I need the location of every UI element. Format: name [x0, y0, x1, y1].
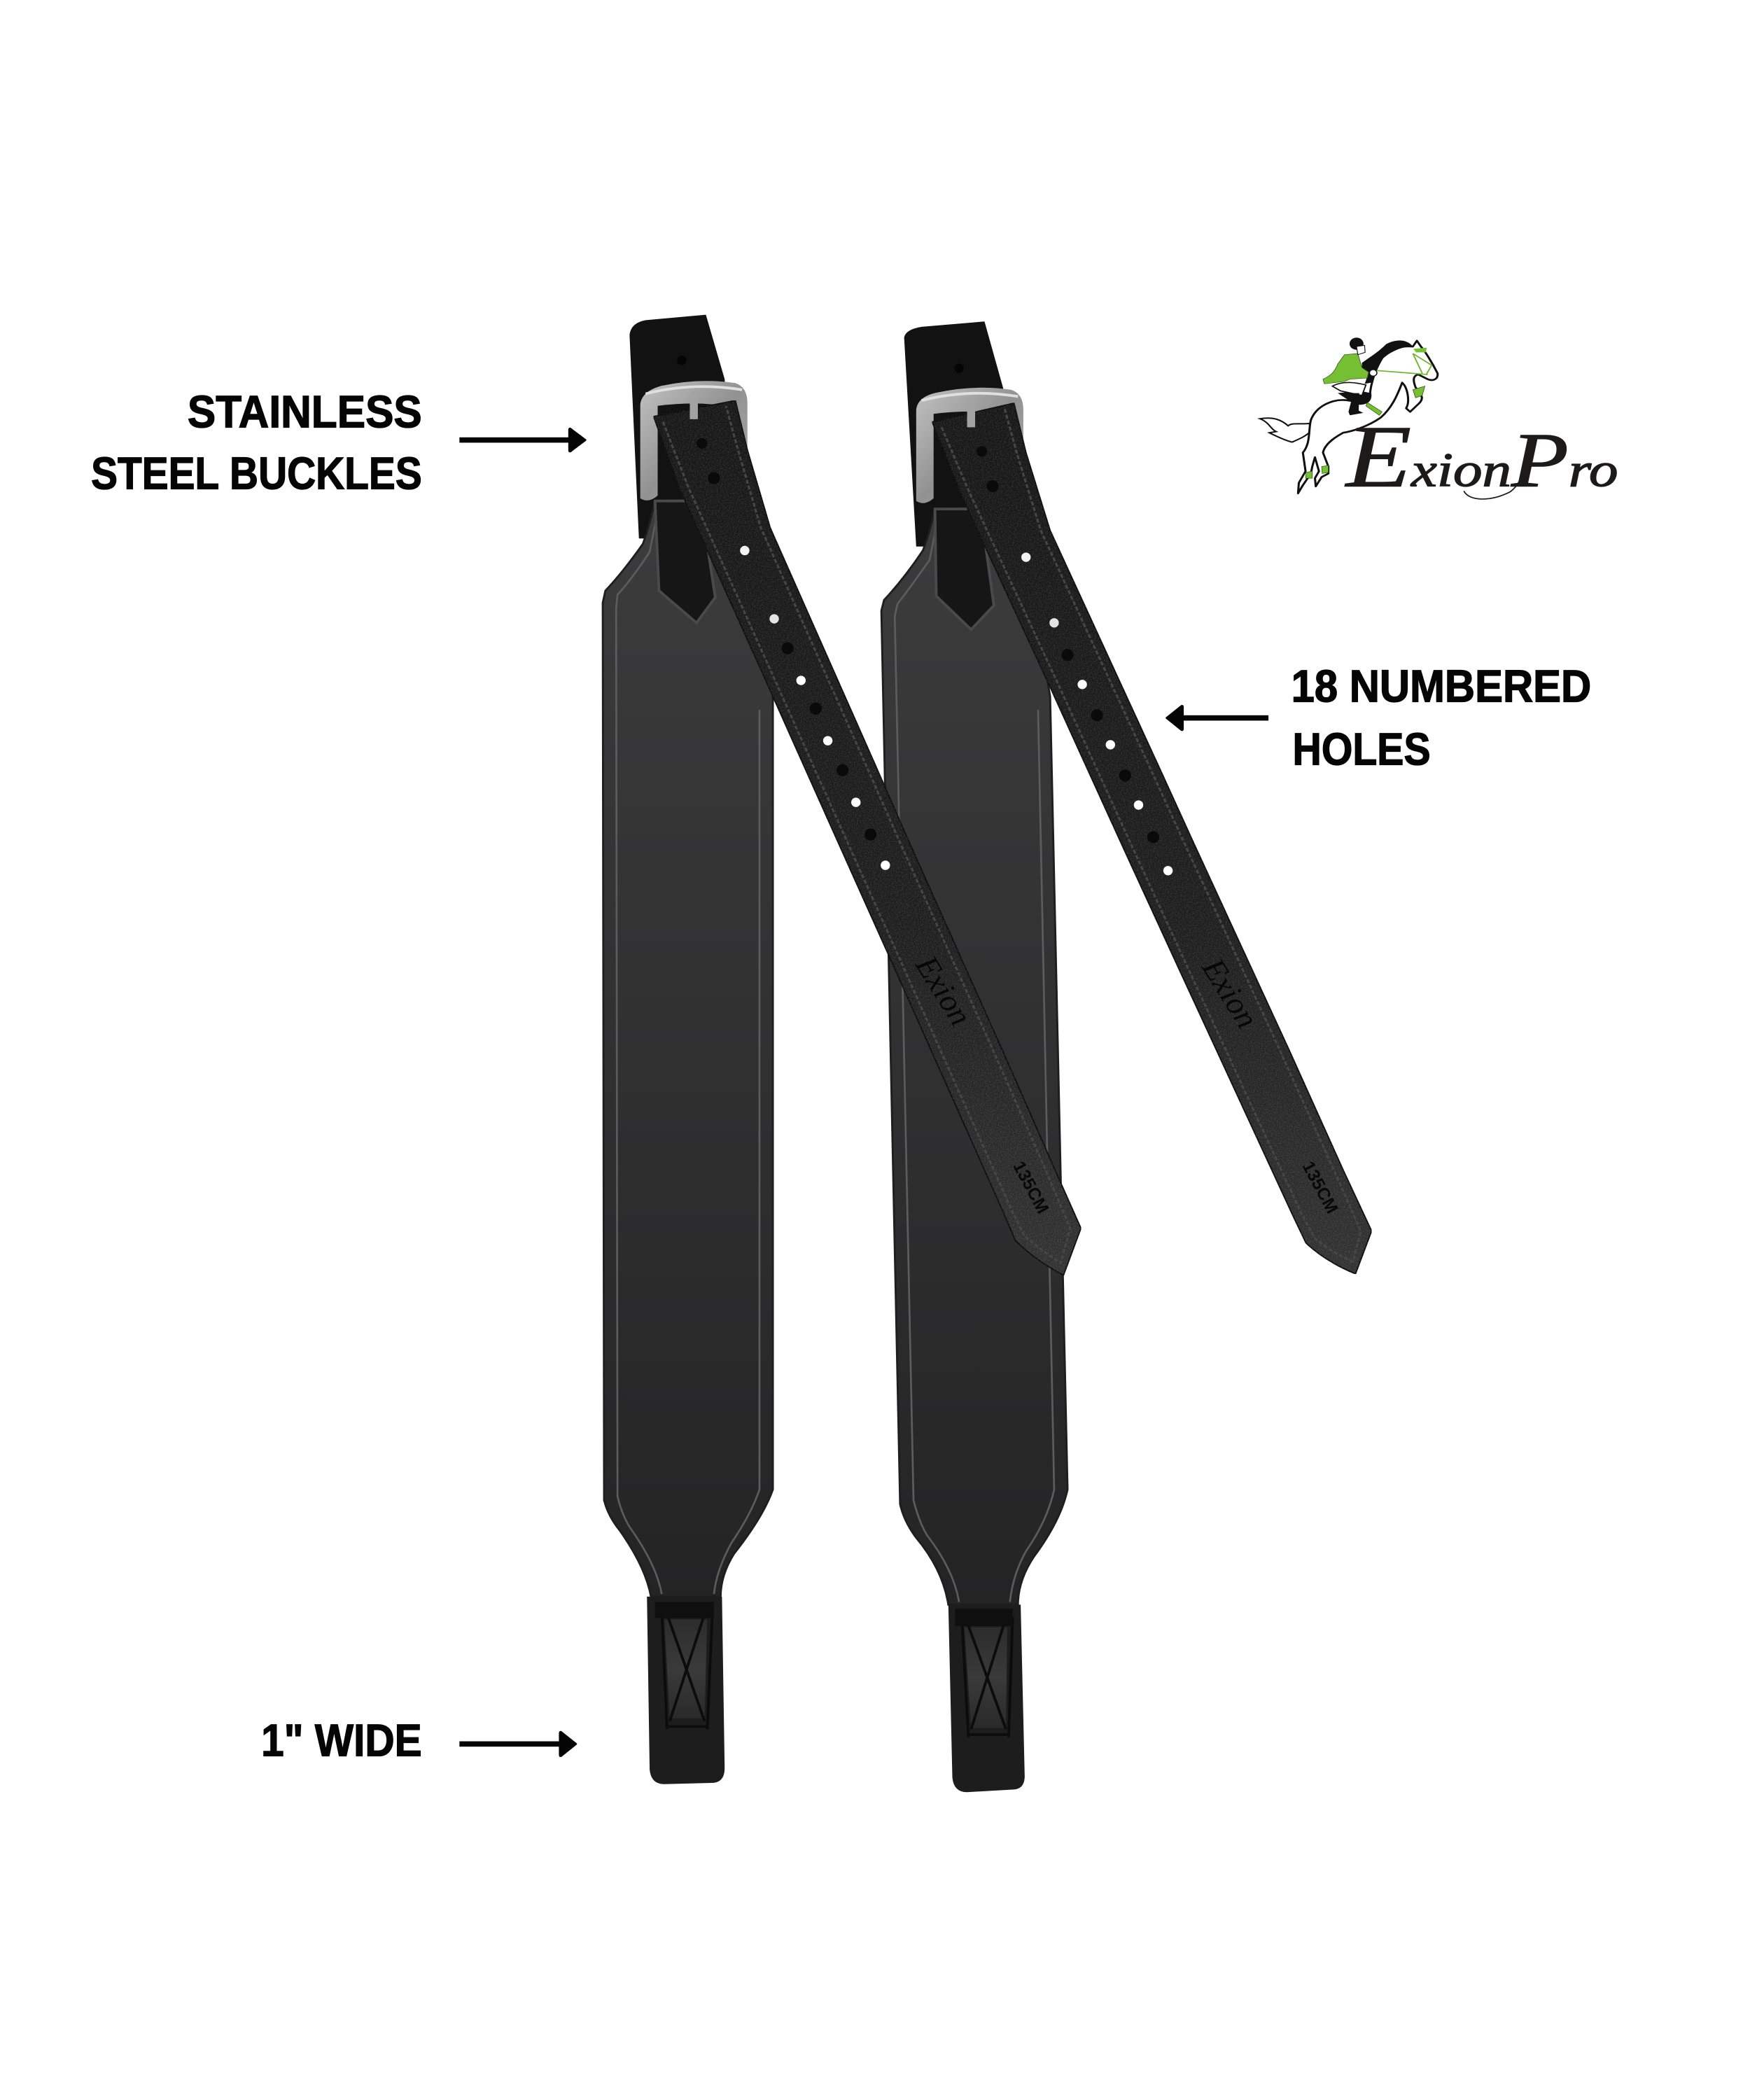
product: left stirrup leather: [603, 315, 1081, 1784]
rider jacket: [1323, 354, 1368, 384]
label text: 18 NUMBERED: [1292, 661, 1591, 712]
holes: [954, 364, 1172, 875]
browband: [1413, 348, 1427, 352]
pointed keeper tab: [935, 509, 994, 629]
pointed keeper tab: [655, 501, 715, 623]
wide body panel: [603, 498, 773, 1597]
script underline flourish: [1464, 462, 1527, 499]
leg boots: [1306, 386, 1425, 478]
embossed brand: Exion: [909, 948, 979, 1032]
back strap running over the top: [904, 321, 1007, 547]
horse body: [1298, 341, 1438, 493]
buckle: [916, 388, 1023, 503]
back strap running over the top: [629, 315, 729, 538]
reins and bridle: [1377, 354, 1432, 374]
logo: ExionPro: [1260, 337, 1618, 506]
callout: 18 numbered holes: [1167, 661, 1591, 775]
callout: 1 inch wide: [261, 1715, 576, 1766]
buckle tongue: [967, 398, 975, 427]
brand wordmark: E xion P ro: [1345, 408, 1618, 506]
callout: stainless steel buckles: [91, 386, 585, 498]
buckle tongue: [690, 391, 698, 419]
label text: STAINLESS: [188, 386, 422, 437]
holes: [677, 356, 890, 870]
front strap with numbered holes: [932, 364, 1371, 1274]
arrow: [1167, 706, 1268, 730]
stitched bottom loop: [948, 1604, 1025, 1792]
label text: [1292, 661, 1591, 775]
horse tail: [1260, 418, 1310, 442]
embossed size: 135CM: [1298, 1158, 1342, 1217]
rider boot: [1348, 393, 1363, 415]
rider head: [1350, 337, 1364, 350]
front strap with numbered holes: [654, 356, 1081, 1275]
product: right stirrup leather: [881, 321, 1371, 1792]
embossed brand: Exion: [1195, 951, 1266, 1035]
label text: 1" WIDE: [261, 1715, 422, 1766]
body edge stitching: [895, 519, 1054, 1602]
label text: [91, 386, 422, 498]
arrow: [459, 428, 585, 451]
arrow: [459, 1732, 576, 1756]
saddle: [1338, 391, 1371, 405]
wide body panel: [881, 506, 1068, 1604]
label text: HOLES: [1293, 724, 1431, 775]
girth: [1366, 402, 1382, 415]
body edge stitching: [616, 512, 760, 1594]
label text: STEEL BUCKLES: [91, 447, 422, 498]
buckle: [640, 381, 748, 500]
icon: jumping horse and rider: [1260, 337, 1527, 499]
stitched bottom loop: [647, 1597, 724, 1784]
rider breeches: [1332, 382, 1366, 396]
embossed size: 135CM: [1009, 1158, 1053, 1217]
rider hand: [1369, 370, 1377, 376]
mane: [1362, 340, 1413, 384]
